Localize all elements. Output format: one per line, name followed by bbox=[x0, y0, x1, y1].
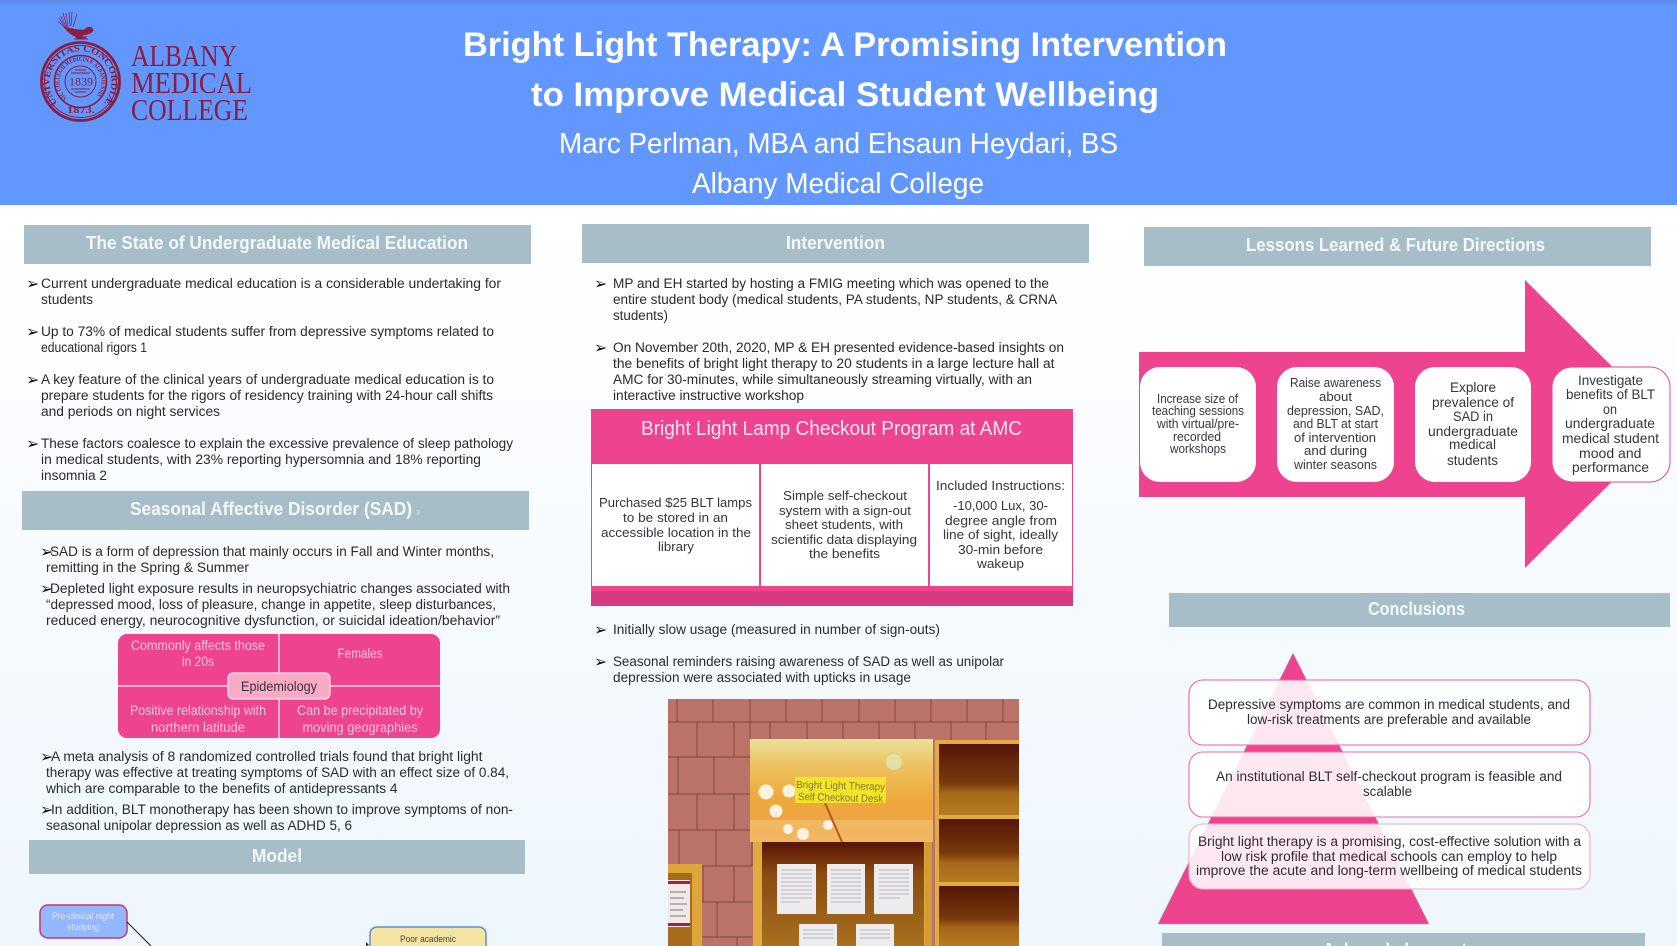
logo wordmark bbox=[131, 38, 252, 127]
bullet list: definition: ➢ bbox=[40, 542, 53, 561]
photo: orange sign: Bright Light Therapy bbox=[796, 779, 886, 793]
header banner bbox=[0, 0, 1677, 205]
cell: self-checkout: sheet students, with bbox=[785, 517, 903, 532]
cell: purchase: library bbox=[658, 539, 694, 554]
cell: self-checkout: Simple self-checkout bbox=[783, 488, 907, 503]
step 2: of intervention bbox=[1294, 430, 1376, 445]
bullet list: usage: Initially slow usage (measured in number of sign-outs) bbox=[613, 622, 940, 637]
center pill: epidemiology bbox=[228, 673, 330, 699]
step 2 bbox=[1277, 367, 1394, 482]
arrow: process chevron bbox=[1139, 280, 1670, 568]
epidemiology matrix: northern latitude bbox=[151, 720, 245, 735]
bullet list: in medical students, with 23% reporting hypersomnia and 18% reporting bbox=[41, 452, 481, 467]
bullet list: workshop: ➢ bbox=[594, 274, 607, 293]
epidemiology matrix: Females bbox=[338, 646, 383, 661]
conclusion 2: An institutional BLT self-checkout program is feasible and bbox=[1216, 769, 1562, 784]
heading bar bbox=[582, 224, 1089, 263]
bullet list: evidence bbox=[40, 747, 513, 833]
bullet list: These factors coalesce to explain the excessive prevalence of sleep pathology bbox=[41, 436, 513, 451]
cell: instructions: wakeup bbox=[976, 556, 1024, 571]
conclusion 3: low risk profile that medical schools can employ to help bbox=[1221, 849, 1557, 864]
step 4: Investigate bbox=[1578, 372, 1643, 388]
authors and institution: Albany Medical College bbox=[692, 168, 984, 200]
step 3: students bbox=[1447, 452, 1498, 468]
panel: the state of undergraduate medical education bbox=[24, 225, 531, 483]
icon: college seal: 1839 bbox=[69, 74, 93, 88]
model box: pre-clinical night studying: studying bbox=[67, 922, 99, 933]
bullet list: Up to 73% of medical students suffer from depressive symptoms related to bbox=[41, 324, 494, 339]
page background bbox=[0, 205, 1677, 946]
cell: instructions: line of sight, ideally bbox=[943, 527, 1059, 542]
bullet list: and periods on night services bbox=[41, 404, 220, 419]
epidemiology matrix: in 20s bbox=[182, 654, 214, 669]
step 4: medical student bbox=[1562, 430, 1659, 446]
bullet list: evidence: which are comparable to the benefits of antidepressants 4 bbox=[45, 781, 398, 796]
panel: lessons learned and future directions bbox=[1139, 227, 1670, 568]
bullet list: ➢ bbox=[26, 370, 39, 389]
bullet list: definition: reduced energy, neurocognitive dysfunction, or suicidal ideation/behavior” bbox=[46, 613, 500, 628]
icon: college seal: 1873. bbox=[67, 106, 95, 116]
cell: self-checkout: the benefits bbox=[809, 546, 881, 561]
cell: instructions: 30-min before bbox=[958, 542, 1043, 557]
bullet list: definition: “depressed mood, loss of pleasure, change in appetite, sleep disturbances, bbox=[46, 597, 496, 612]
panel: conclusions bbox=[1158, 593, 1670, 924]
bullet list: evidence: ➢ bbox=[40, 800, 53, 819]
bullet list bbox=[26, 274, 513, 483]
epidemiology matrix: Commonly affects those bbox=[131, 638, 265, 653]
logo: Albany Medical College bbox=[40, 12, 252, 127]
step 4: on bbox=[1603, 401, 1617, 417]
bullet list: evidence: seasonal unipolar depression as well as ADHD 5, 6 bbox=[46, 818, 352, 833]
epidemiology matrix: Positive relationship with bbox=[130, 703, 266, 718]
epidemiology matrix: Can be precipitated by bbox=[297, 703, 423, 718]
conclusion 1: low-risk treatments are preferable and available bbox=[1247, 712, 1531, 727]
step 3: medical bbox=[1449, 436, 1496, 452]
table heading: Bright Light Lamp Checkout Program at AMC bbox=[641, 418, 1022, 440]
logo wordmark: ALBANY bbox=[131, 38, 237, 73]
cell: self-checkout: scientific data displaying bbox=[771, 532, 917, 547]
bullet list: workshop: interactive instructive workshop bbox=[613, 388, 804, 403]
heading bar bbox=[22, 491, 529, 530]
heading bar: Seasonal Affective Disorder (SAD) bbox=[130, 499, 412, 519]
step 3: SAD in bbox=[1453, 408, 1493, 424]
bullet list: workshop: the benefits of bright light therapy to 20 students in a large lecture hall at bbox=[613, 356, 1055, 371]
photo: bright light therapy self checkout desk bbox=[668, 699, 1019, 946]
model box: pre-clinical night studying bbox=[40, 905, 127, 938]
photo: center display cabinet with papers bbox=[753, 842, 932, 946]
heading bar: Lessons Learned & Future Directions bbox=[1246, 235, 1545, 255]
cell: instructions: Included Instructions: bbox=[936, 478, 1065, 493]
conclusion 1 bbox=[1189, 680, 1590, 745]
bullet list: usage: ➢ bbox=[594, 620, 607, 639]
step 4: benefits of BLT bbox=[1566, 386, 1655, 402]
model box: poor academic performance bbox=[370, 927, 486, 946]
bullet list: workshop: MP and EH started by hosting a FMIG meeting which was opened to the bbox=[613, 276, 1049, 291]
pyramid bbox=[1158, 653, 1429, 924]
step 2: Raise awareness bbox=[1290, 375, 1381, 390]
step 1: recorded bbox=[1173, 430, 1221, 444]
title bbox=[463, 26, 1227, 114]
logo wordmark: MEDICAL bbox=[131, 65, 252, 100]
center pill: epidemiology: Epidemiology bbox=[241, 678, 317, 694]
panel: seasonal affective disorder bbox=[22, 491, 529, 833]
heading bar: The State of Undergraduate Medical Education bbox=[86, 233, 468, 253]
bullet list: students bbox=[41, 292, 93, 307]
bullet list: ➢ bbox=[26, 322, 39, 341]
bullet list: usage bbox=[594, 620, 1004, 685]
conclusion 2: scalable bbox=[1363, 784, 1412, 799]
bullet list: definition: remitting in the Spring & Summer bbox=[46, 560, 249, 575]
bullet list: usage: Seasonal reminders raising awareness of SAD as well as unipolar bbox=[613, 654, 1004, 669]
bullet list: insomnia 2 bbox=[41, 468, 107, 483]
icon: college seal: SIC COLLEGII MEDICINÆ ALBANIENSIS bbox=[56, 56, 106, 100]
photo: right shelving bbox=[935, 740, 1019, 946]
conclusion 3: Bright light therapy is a promising, cost-effective solution with a bbox=[1198, 834, 1581, 849]
heading bar bbox=[1144, 227, 1651, 266]
conclusion 1: Depressive symptoms are common in medical students, and bbox=[1208, 697, 1570, 712]
heading bar: Model bbox=[252, 846, 302, 866]
bullet list: A key feature of the clinical years of undergraduate medical education is to bbox=[41, 372, 494, 387]
panel: intervention bbox=[582, 224, 1089, 946]
step 3 bbox=[1415, 367, 1531, 482]
panel: acknowledgements heading bbox=[1162, 933, 1645, 946]
panel: model bbox=[29, 840, 525, 946]
bullet list: workshop: students) bbox=[613, 308, 668, 323]
step 4: mood and bbox=[1579, 445, 1642, 461]
photo: orange sign: Self Checkout Desk bbox=[798, 791, 884, 805]
step 4 bbox=[1552, 367, 1670, 482]
cell: instructions: -10,000 Lux, 30- bbox=[953, 498, 1048, 513]
bullet list: definition bbox=[40, 542, 510, 628]
step 3: undergraduate bbox=[1428, 423, 1518, 439]
cell: purchase: to be stored in an bbox=[623, 510, 728, 525]
icon: lamp of knowledge bbox=[58, 12, 93, 39]
cell: purchase: Purchased $25 BLT lamps bbox=[599, 495, 752, 510]
step 3: Explore bbox=[1450, 379, 1496, 395]
step 2: and BLT at start bbox=[1293, 416, 1378, 431]
bullet list: evidence: A meta analysis of 8 randomized controlled trials found that bright light bbox=[51, 749, 483, 764]
step 1 bbox=[1140, 367, 1256, 482]
conclusion 3 bbox=[1189, 824, 1590, 889]
bullet list: evidence: In addition, BLT monotherapy has been shown to improve symptoms of non- bbox=[51, 802, 513, 817]
epidemiology matrix: moving geographies bbox=[302, 720, 418, 735]
cell: self-checkout: system with a sign-out bbox=[779, 503, 911, 518]
step 2: and during bbox=[1304, 443, 1367, 458]
title: Bright Light Therapy: A Promising Intervention bbox=[463, 26, 1227, 64]
step 1: Increase size of bbox=[1157, 392, 1238, 406]
bullet list: evidence: ➢ bbox=[40, 747, 53, 766]
model box: poor academic performance: Poor academic bbox=[400, 934, 456, 945]
bullet list: educational rigors 1 bbox=[41, 340, 147, 355]
icon: college seal: UNIVERSITAS CONCORDIÆ bbox=[43, 45, 118, 106]
step 1: teaching sessions bbox=[1152, 404, 1244, 418]
epidemiology matrix bbox=[118, 634, 440, 738]
authors and institution bbox=[559, 128, 1118, 200]
bullet list: evidence: therapy was effective at treating symptoms of SAD with an effect size of 0.84, bbox=[46, 765, 509, 780]
bullet list: usage: ➢ bbox=[594, 652, 607, 671]
bullet list: definition: Depleted light exposure results in neuropsychiatric changes associated with bbox=[50, 581, 510, 596]
cell: self-checkout bbox=[761, 464, 928, 586]
heading bar bbox=[29, 840, 525, 874]
cell: instructions: degree angle from bbox=[945, 513, 1057, 528]
bullet list: usage: depression were associated with upticks in usage bbox=[613, 670, 911, 685]
bullet list: ➢ bbox=[26, 274, 39, 293]
authors and institution: Marc Perlman, MBA and Ehsaun Heydari, BS bbox=[559, 128, 1118, 160]
heading bar bbox=[1169, 593, 1670, 627]
bullet list: workshop: entire student body (medical students, PA students, NP students, & CRNA bbox=[613, 292, 1057, 307]
bullet list: ➢ bbox=[26, 434, 39, 453]
bullet list: workshop: On November 20th, 2020, MP & EH presented evidence-based insights on bbox=[613, 340, 1064, 355]
heading bar: Intervention bbox=[786, 233, 885, 253]
title: to Improve Medical Student Wellbeing bbox=[531, 76, 1159, 114]
bullet list: definition: SAD is a form of depression that mainly occurs in Fall and Winter months, bbox=[50, 544, 494, 559]
bullet list: workshop: ➢ bbox=[594, 338, 607, 357]
cell: purchase bbox=[592, 464, 759, 586]
logo wordmark: COLLEGE bbox=[131, 92, 248, 127]
bullet list: prepare students for the rigors of residency training with 24-hour call shifts bbox=[41, 388, 493, 403]
arrowhead: into poor academic box bbox=[366, 942, 369, 946]
photo: orange sign bbox=[750, 739, 933, 842]
step 2: about bbox=[1319, 389, 1352, 404]
model box: pre-clinical night studying: Pre-clinical night bbox=[52, 911, 114, 922]
heading bar: Conclusions bbox=[1368, 599, 1465, 619]
step 2: winter seasons bbox=[1293, 457, 1377, 472]
photo: left shelf with flyer bbox=[668, 864, 702, 946]
arrow: model connector bbox=[127, 922, 151, 946]
heading bar: 3 bbox=[416, 510, 420, 517]
bullet list: definition: ➢ bbox=[40, 579, 53, 598]
step 1: workshops bbox=[1169, 442, 1226, 456]
cell: instructions bbox=[930, 464, 1072, 586]
cell: purchase: accessible location in the bbox=[601, 525, 751, 540]
bullet list: Current undergraduate medical education is a considerable undertaking for bbox=[41, 276, 502, 291]
conclusion 3: improve the acute and long-term wellbeing of medical students bbox=[1196, 863, 1582, 878]
step 4: performance bbox=[1572, 459, 1649, 475]
step 4: undergraduate bbox=[1565, 415, 1655, 431]
table: bright light lamp checkout program bbox=[591, 409, 1073, 606]
conclusion 2 bbox=[1189, 752, 1590, 817]
bullet list: workshop bbox=[594, 274, 1064, 403]
bullet list: workshop: AMC for 30-minutes, while simultaneously streaming virtually, with an bbox=[613, 372, 1032, 387]
step 1: with virtual/pre- bbox=[1156, 417, 1239, 431]
heading bar bbox=[24, 225, 531, 264]
step 2: depression, SAD, bbox=[1287, 403, 1384, 418]
step 3: prevalence of bbox=[1432, 394, 1514, 410]
